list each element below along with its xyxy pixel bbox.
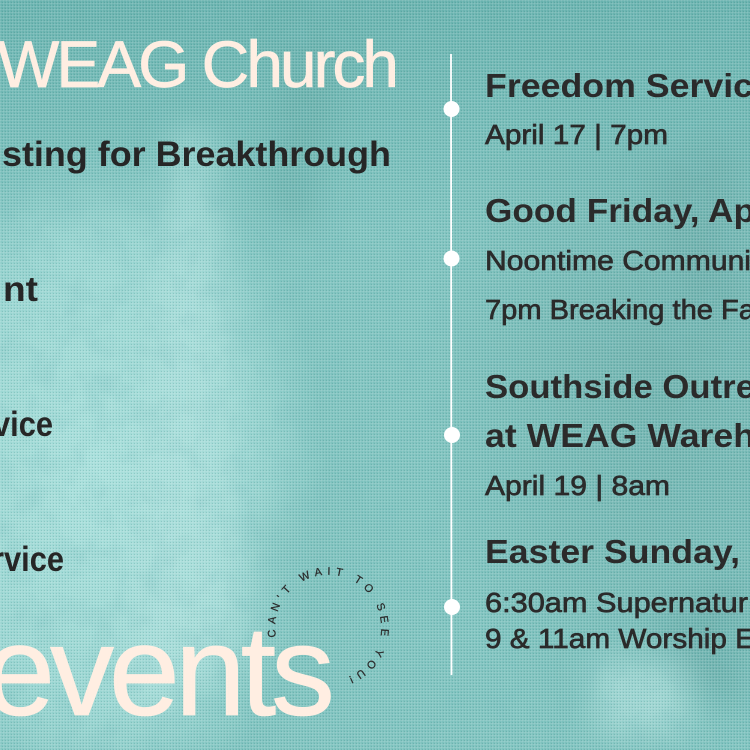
event: Southside Outreach: April 19 | 8am xyxy=(485,470,670,501)
event: Good Friday: Good Friday, Ap xyxy=(485,192,750,229)
event: Easter Sunday: 6:30am Supernatur xyxy=(485,587,748,618)
event: Southside Outreach xyxy=(485,368,750,501)
timeline dot 2 xyxy=(444,250,460,266)
schedule item: fasting for breakthrough: sting for Breakthrough xyxy=(2,135,391,174)
event: Good Friday: 7pm Breaking the Fa xyxy=(485,294,750,325)
event: Freedom Service: April 17 | 7pm xyxy=(485,119,668,150)
event: Southside Outreach: Southside Outre xyxy=(485,368,750,405)
timeline dot 3 xyxy=(444,427,460,443)
left column: clipped schedule panel xyxy=(0,27,399,743)
event: Good Friday xyxy=(485,192,750,325)
event: Easter Sunday: Easter Sunday, xyxy=(485,533,740,570)
event: Easter Sunday xyxy=(485,533,750,654)
timeline dot 4 xyxy=(444,599,460,615)
schedule item: fragment nt: nt xyxy=(3,270,38,309)
event: Freedom Service xyxy=(485,67,750,150)
timeline dot 1 xyxy=(444,101,460,117)
right column: events list xyxy=(485,67,750,654)
circular badge text: CAN'T WAIT TO SEE YOU! xyxy=(268,567,389,684)
timeline xyxy=(444,54,460,675)
event: Good Friday: Noontime Communi xyxy=(485,245,750,276)
heading: WEAG Church: WEAG Church xyxy=(0,27,399,101)
event: Freedom Service: Freedom Servic xyxy=(485,67,750,104)
event: Southside Outreach: at WEAG Wareh xyxy=(485,417,750,454)
event: Easter Sunday: 9 & 11am Worship E xyxy=(485,623,750,654)
